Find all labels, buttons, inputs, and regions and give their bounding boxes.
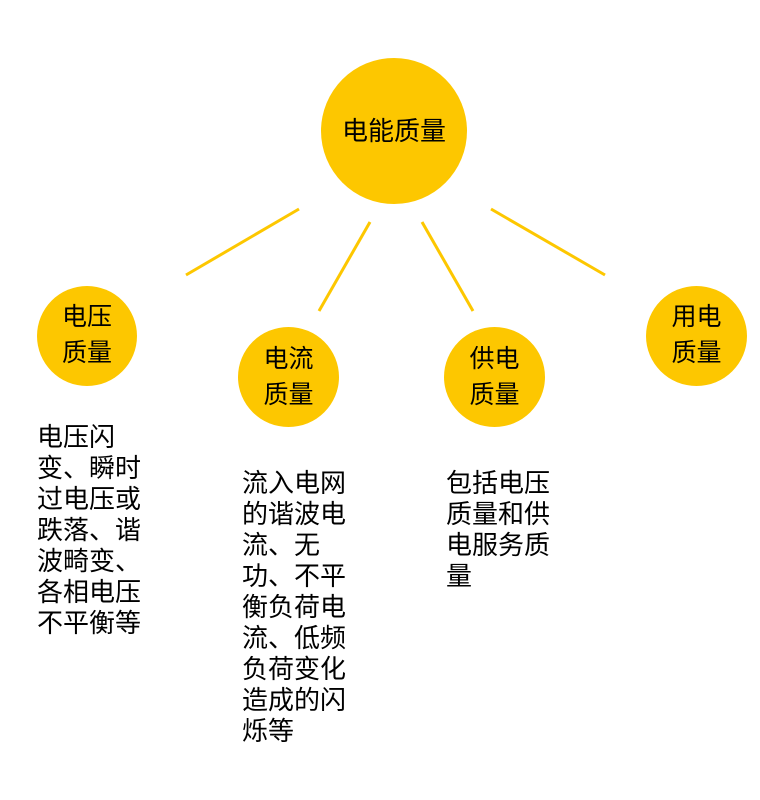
text: 供电质量 description: 包括电压 [446,468,550,498]
line to 电压质量 [186,209,299,275]
line to 电流质量 [319,222,370,311]
circle: 供电质量: 供电 [469,345,520,373]
text: 电压质量 description: 电压闪 [37,422,115,452]
circle: 供电质量 [444,327,545,427]
central circle: 电能质量: 电能质量 [342,116,446,146]
line to 供电质量 [422,222,473,311]
text: 电压质量 description: 变、瞬时 [37,453,141,483]
text: 电流质量 description: 功、不平 [242,561,346,591]
text: 电压质量 description [37,422,141,638]
text: 供电质量 description: 电服务质 [446,530,550,560]
text: 电流质量 description: 流、低频 [242,623,346,653]
text: 电压质量 description: 跌落、谐 [37,515,141,545]
circle: 用电质量: 用电 [671,303,722,331]
text: 电流质量 description: 造成的闪 [242,685,346,715]
text: 电流质量 description: 负荷变化 [242,654,346,684]
text: 供电质量 description: 质量和供 [446,499,550,529]
text: 电流质量 description: 衡负荷电 [242,592,346,622]
circle: 供电质量: 质量 [469,380,520,408]
text: 电流质量 description: 的谐波电 [242,499,346,529]
text: 电流质量 description: 烁等 [242,716,294,746]
circle: 电压质量 [37,286,137,386]
text: 电流质量 description: 流入电网 [242,468,346,498]
line to 用电质量 [491,209,605,275]
text: 电压质量 description: 不平衡等 [37,608,141,638]
circle: 电流质量: 质量 [263,380,314,408]
text: 供电质量 description: 量 [446,561,472,591]
text: 供电质量 description [446,468,550,591]
text: 电压质量 description: 各相电压 [37,577,141,607]
circle: 电压质量: 电压 [62,303,112,331]
circle: 电流质量: 电流 [263,345,314,373]
circle: 电压质量: 质量 [62,338,112,366]
central circle: 电能质量 [321,58,467,204]
text: 电流质量 description: 流、无 [242,530,320,560]
text: 电压质量 description: 波畸变、 [37,546,141,576]
text: 电压质量 description: 过电压或 [37,484,141,514]
circle: 用电质量 [646,286,747,386]
text: 电流质量 description [242,468,346,746]
circle: 用电质量: 质量 [671,338,722,366]
circle: 电流质量 [238,327,339,427]
